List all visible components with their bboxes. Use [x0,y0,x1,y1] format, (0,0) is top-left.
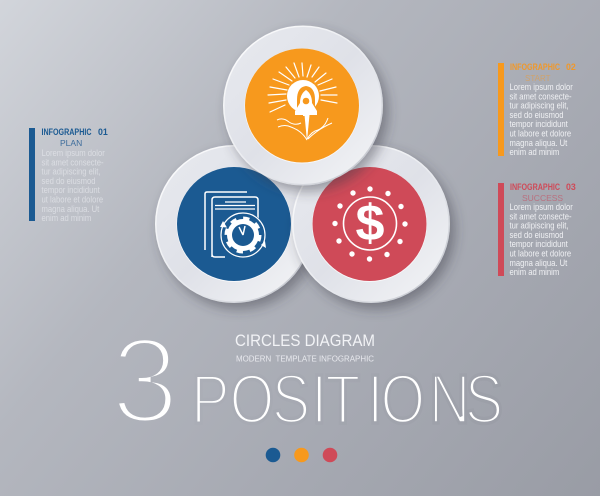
body text: sit amet consecte- [42,158,104,167]
body text: tempor incididunt [42,186,100,195]
body text: sed do eiusmod [510,110,564,120]
bar: red [498,183,504,276]
heading: infographic 03: INFOGRAPHIC [510,182,561,192]
body text: Lorem ipsum dolor [42,149,105,158]
big numeral 3: 3 [111,312,179,448]
body text: Lorem ipsum dolor [510,83,573,92]
heading: infographic 02: 02 [566,62,576,72]
subheading: success: SUCCESS [522,193,563,203]
big word positions: POSITIONS [191,359,503,438]
icon: dollar coin with dots [332,186,408,262]
bar: orange [498,63,504,156]
body text: tur adipiscing elit, [42,167,101,177]
body text: tur adipiscing elit, [510,221,569,231]
pagination dots [266,448,337,462]
body text [42,149,105,223]
body text: enim ad minim [510,148,559,157]
heading: infographic 01: 01 [98,127,108,137]
text block: infographic 01 [29,127,108,223]
panel: orange circle (start rocket) [223,26,383,186]
body text: sit amet consecte- [510,212,572,221]
panel: red circle (success) [292,145,450,303]
subheading: plan: PLAN [60,138,82,148]
title: circles diagram: CIRCLES DIAGRAM [235,332,375,350]
body text: Lorem ipsum dolor [510,203,573,212]
body text [510,203,573,277]
text block: infographic 03 [498,182,576,277]
subheading: start: START [525,74,551,83]
text block: infographic 02 [498,62,576,157]
body text: ut labore et dolore [510,249,572,259]
body text: sed do eiusmod [42,176,96,186]
heading: infographic 01: INFOGRAPHIC [42,127,92,137]
body text: sit amet consecte- [510,92,572,101]
body text: magna aliqua. Ut [42,204,100,214]
body text: ut labore et dolore [42,195,104,205]
body text [510,83,573,157]
body text: enim ad minim [510,268,559,277]
heading: infographic 03: 03 [566,182,576,192]
body text: enim ad minim [42,214,91,223]
icon: dollar coin with dots: $ [356,194,384,251]
body text: tur adipiscing elit, [510,101,569,111]
panel: blue circle (plan) [155,145,313,303]
subtitle: modern template infographic: MODERN TEMPLATE INFOGRAPHIC [236,354,374,364]
body text: sed do eiusmod [510,230,564,240]
body text: magna aliqua. Ut [510,138,568,148]
heading: infographic 02: INFOGRAPHIC [510,62,561,72]
body text: tempor incididunt [510,240,568,249]
body text: tempor incididunt [510,120,568,129]
body text: ut labore et dolore [510,129,572,139]
icon: rocket with sun [268,63,337,141]
icon: documents with gear clock [205,192,266,258]
body text: magna aliqua. Ut [510,258,568,268]
bar: blue [29,128,35,221]
